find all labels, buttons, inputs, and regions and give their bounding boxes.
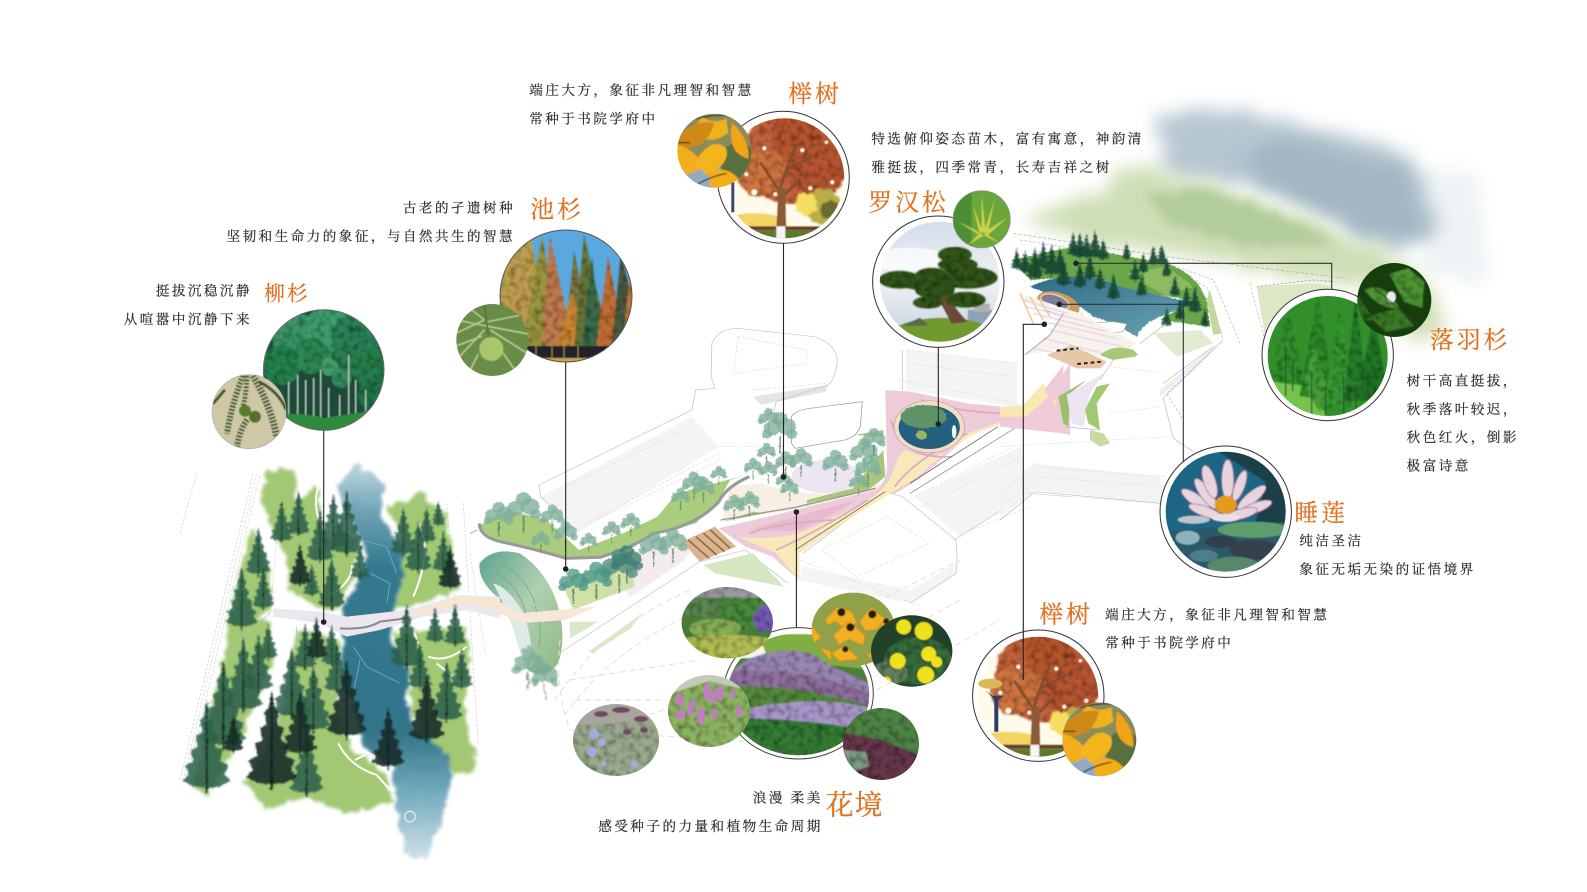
heading: 榉树 lower: 榉树 bbox=[1039, 601, 1093, 628]
text: 榉树 lower description bbox=[1105, 606, 1329, 651]
text labels (measured in 1568-wide frame) bbox=[124, 81, 1519, 834]
heading: 池杉: 池杉 bbox=[530, 197, 584, 224]
forest ground bbox=[193, 468, 477, 813]
text: 罗汉松 description bbox=[871, 131, 1144, 176]
connector: 罗汉松 bbox=[936, 347, 941, 427]
watercolor forest bbox=[180, 463, 500, 860]
text: 池杉 description bbox=[227, 200, 515, 245]
conifers bbox=[182, 490, 473, 797]
heading: 罗汉松: 罗汉松 bbox=[868, 189, 949, 216]
plaza pink ground bbox=[719, 363, 1070, 580]
text: 榉树 description: 端庄大方，象征非凡理智和智慧 bbox=[529, 82, 754, 99]
plaza yellow ribbons bbox=[738, 398, 1056, 580]
photo: 池杉 forest bbox=[496, 229, 642, 363]
text: 睡莲 description: 象征无垢无染的证悟境界 bbox=[1299, 561, 1476, 577]
connector: 榉树 bbox=[781, 243, 786, 480]
green strip with path edge bbox=[480, 475, 746, 558]
text: 落羽杉 description bbox=[1407, 373, 1519, 474]
faint road dashes bbox=[180, 473, 478, 780]
photo: 池杉 cone bbox=[454, 303, 529, 377]
pond in roundabout bbox=[894, 401, 964, 453]
connector: 花境 bbox=[794, 509, 799, 628]
heading: 柳杉: 柳杉 bbox=[264, 283, 310, 306]
watercolor background: mountains bbox=[1023, 103, 1487, 340]
peach path bbox=[459, 595, 596, 623]
timber stair bbox=[682, 527, 736, 562]
text: 池杉 description: 坚韧和生命力的象征，与自然共生的智慧 bbox=[227, 228, 515, 245]
photo: 罗汉松 bbox=[872, 216, 1004, 348]
clump south of hill bbox=[512, 647, 559, 700]
photo: meadow bbox=[572, 703, 660, 777]
photo: 榉树 tree bbox=[717, 108, 850, 244]
lamp post bbox=[978, 679, 1004, 732]
photo: liatris spikes bbox=[667, 674, 751, 748]
photo: 榉树 leaves second bbox=[1062, 702, 1136, 776]
text: 花境 description: 浪漫 柔美 bbox=[753, 791, 823, 806]
heading: 睡莲: 睡莲 bbox=[1294, 500, 1348, 527]
photo: shrubs with purple bbox=[680, 586, 774, 660]
heading: 花境: 花境 bbox=[826, 791, 883, 822]
plaza lawn and cream paving bbox=[723, 460, 887, 520]
heading: 落羽杉: 落羽杉 bbox=[1430, 327, 1510, 354]
photo: 落羽杉 leaf bbox=[1356, 262, 1432, 338]
upper right garden and pond bbox=[1011, 230, 1347, 420]
photo: foliage burgundy bbox=[842, 707, 920, 781]
text: 花境 description bbox=[598, 791, 823, 834]
text: 落羽杉 description: 树干高直挺拔， bbox=[1407, 373, 1519, 390]
text: 柳杉 description: 从喧嚣中沉静下来 bbox=[124, 311, 252, 327]
text: 睡莲 description bbox=[1299, 532, 1476, 577]
text: 落羽杉 description: 秋季落叶较迟， bbox=[1407, 401, 1519, 418]
text: 柳杉 description bbox=[124, 283, 252, 327]
text: 榉树 description: 常种于书院学府中 bbox=[529, 110, 657, 126]
photo: rudbeckia bbox=[810, 591, 896, 667]
text: 罗汉松 description: 雅挺拔，四季常青，长寿吉祥之树 bbox=[871, 159, 1112, 176]
flower border photos bbox=[572, 586, 954, 781]
conifers around pond bbox=[1011, 230, 1210, 335]
teal hill bbox=[479, 551, 562, 674]
text: 榉树 lower description: 端庄大方，象征非凡理智和智慧 bbox=[1105, 606, 1329, 623]
lower-left linework bbox=[555, 560, 1000, 745]
site plan linework and plaza bbox=[459, 328, 1070, 674]
text: 罗汉松 description: 特选俯仰姿态苗木，富有寓意，神韵清 bbox=[871, 131, 1144, 148]
building outlines bbox=[470, 328, 1070, 657]
text: 落羽杉 description: 秋色红火，倒影 bbox=[1407, 429, 1519, 446]
photo: yellow daisies bbox=[870, 614, 954, 688]
text: 池杉 description: 古老的孑遗树种 bbox=[403, 200, 515, 216]
footbridge bbox=[273, 595, 500, 637]
text: 花境 description: 感受种子的力量和植物生命周期 bbox=[598, 818, 823, 834]
hatched crossing bbox=[1047, 345, 1107, 368]
building wall shading bbox=[541, 350, 1029, 603]
viewing deck bbox=[1034, 286, 1083, 322]
photo: flower main bbox=[723, 628, 873, 759]
leaf trees bbox=[484, 408, 886, 603]
pond and garden green bbox=[1012, 247, 1210, 327]
river bbox=[337, 463, 452, 860]
text: 榉树 description bbox=[529, 82, 754, 126]
connector: 睡莲 bbox=[1056, 302, 1183, 465]
photo: 睡莲 bbox=[1160, 446, 1291, 577]
heading: 榉树 top: 榉树 bbox=[788, 81, 842, 108]
connector: 落羽杉 bbox=[1073, 260, 1332, 292]
connector: 柳杉 bbox=[321, 428, 327, 625]
connector: 池杉 bbox=[563, 360, 568, 572]
connector: 榉树 second bbox=[1023, 322, 1047, 680]
plaza stripes and ribbons, north-east bbox=[1000, 293, 1222, 520]
white paths bbox=[316, 487, 467, 790]
text: 落羽杉 description: 极富诗意 bbox=[1407, 458, 1471, 474]
text: 榉树 lower description: 常种于书院学府中 bbox=[1105, 635, 1233, 651]
photo: 罗汉松 needles bbox=[952, 189, 1012, 249]
lawn panels bbox=[1257, 283, 1333, 347]
photo: 榉树 leaves bbox=[677, 114, 752, 188]
photo: 榉树 tree second bbox=[972, 627, 1104, 763]
text: 睡莲 description: 纯洁圣洁 bbox=[1299, 532, 1364, 548]
text: 柳杉 description: 挺拔沉稳沉静 bbox=[156, 283, 252, 299]
photo: 落羽杉 forest bbox=[1262, 289, 1393, 421]
photo: 柳杉 branch bbox=[211, 374, 287, 450]
photo: 柳杉 forest bbox=[262, 306, 394, 431]
